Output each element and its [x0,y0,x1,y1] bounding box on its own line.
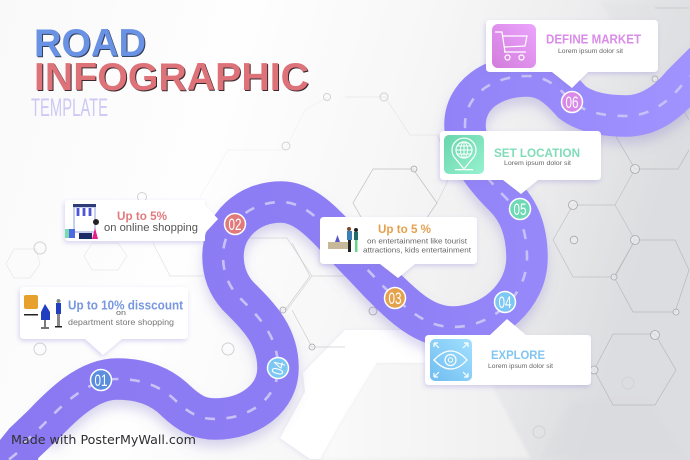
badge 04 [494,292,516,312]
card 2: online shopping [65,200,218,241]
card 2 text: Up to 5% [117,209,167,223]
badge 01: 01 [94,372,108,390]
card 5 text: SET LOCATION [494,146,580,160]
card 3 text: Up to 5 % [378,224,431,236]
badge 05: 05 [514,201,526,219]
card 6 text: DEFINE MARKET [546,32,641,46]
card 2 text [104,209,198,234]
card 4 text: EXPLORE [491,348,545,362]
icon: couple and attraction [328,227,358,252]
icon: shopping cart [492,24,536,68]
watermark: Made with PosterMyWall.com [11,432,196,447]
card 1 text: department store shopping [68,318,174,327]
card 5: set location [440,131,601,194]
title: TEMPLATE [31,94,108,122]
title [31,22,310,122]
icon: storefront [65,204,99,239]
icon: clothes and shopper [24,295,62,328]
rotated badge 04 on road: 04 [269,360,289,377]
card 1: department store [20,287,188,355]
title: INFOGRAPHIC [34,56,309,99]
badge 06 [562,92,582,112]
badge 02: 02 [228,216,242,234]
badge 01 [90,370,112,390]
title: ROAD [35,23,147,66]
card 5 text [494,146,580,167]
card 3 text [363,224,472,254]
card 2 text: on online shopping [104,222,198,234]
card 6 text: Lorem ipsum dolor sit [558,48,623,55]
title: ROAD [34,22,146,65]
icon: location pin with globe [444,135,484,174]
badge 03: 03 [388,290,402,308]
card 4 text [488,348,553,370]
badge 02 [224,214,246,234]
card 1 text: Up to 10% disscount [68,298,184,312]
card 3 text: attractions, kids entertainment [363,246,472,254]
badge 06: 06 [566,94,578,112]
card 4: explore [425,319,591,385]
card 6: define market [486,20,658,88]
badge 05 [510,198,530,220]
road shadow [40,70,690,436]
soft background hexagons [280,2,688,459]
card 6 text [546,32,641,55]
card 1 text [68,298,184,327]
badge 04: 04 [498,294,512,312]
title: INFOGRAPHIC [35,57,310,100]
icon: eye [430,339,472,381]
card 3 text: on entertainment like tourist [367,236,468,246]
badge 03 [384,288,406,308]
card 1 text: on [116,310,126,317]
card 4 text: Lorem ipsum dolor sit [488,363,553,370]
card 5 text: Lorem ipsum dolor sit [504,160,571,167]
card 3: entertainment [320,217,477,278]
